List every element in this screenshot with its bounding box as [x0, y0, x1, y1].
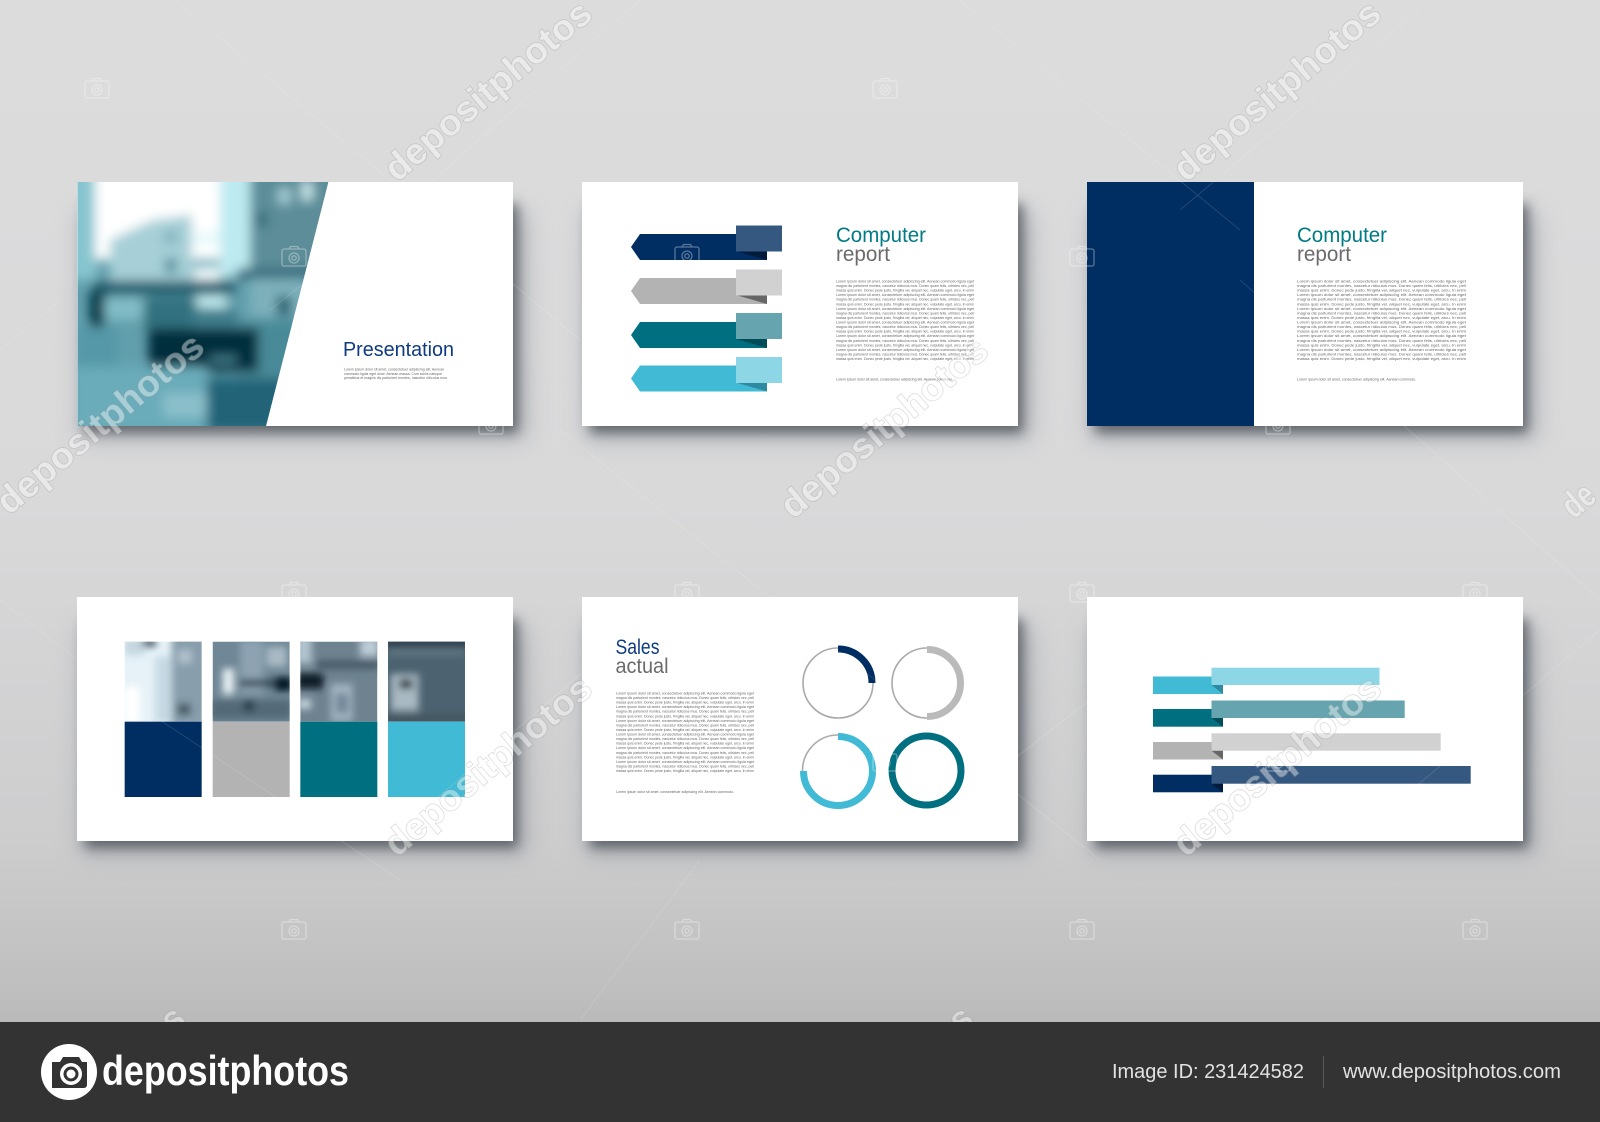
text block: sales body: massa quis enim. Donec pede justo, fringilla vel, aliquet nec, vulputate eget, arcu. In enim [616, 701, 754, 705]
text block: report body: Lorem ipsum dolor sit amet, consectetuer adipiscing elit. Aenean commodo. [1297, 378, 1416, 382]
text block: cover caption: commodo ligula eget dolor. Aenean massa. Cum sociis natoque [344, 372, 442, 376]
ring: navy quarter [803, 648, 873, 718]
text block: report body: magna dis parturient montes, nascetur ridiculus mus. Donec quam felis, ultricies nec, pell [1297, 298, 1466, 302]
panel: horizontal ribbon bars [1087, 597, 1537, 855]
text block: report body: magna dis parturient montes, nascetur ridiculus mus. Donec quam felis, ultricies nec, pell [836, 325, 974, 329]
text block: report body: massa quis enim. Donec pede justo, fringilla vel, aliquet nec, vulputate eget, arcu. In enim [836, 289, 974, 293]
swatch column 3: photo over teal [297, 637, 380, 797]
swatch column 2: photo over grey [210, 640, 293, 797]
text block: report body: massa quis enim. Donec pede justo, fringilla vel, aliquet nec, vulputate eget, arcu. In enim [1297, 289, 1466, 293]
watermark text: depositphotos repeats: os [136, 997, 193, 1054]
text block: report body: Lorem ipsum dolor sit amet, consectetuer adipiscing elit. Aenean commodo ligula eget [836, 334, 974, 338]
text block: sales body: magna dis parturient montes, nascetur ridiculus mus. Donec quam felis, ultricies nec, pell [616, 710, 754, 714]
text block: report body: Lorem ipsum dolor sit amet, consectetuer adipiscing elit. Aenean commodo. [836, 378, 953, 382]
heading: Sales actual: actual [616, 655, 668, 678]
bar: teal [1153, 700, 1405, 727]
text block: report body: massa quis enim. Donec pede justo, fringilla vel, aliquet nec, vulputate eget, arcu. In enim [836, 316, 974, 320]
website url: www.depositphotos.com [1342, 1060, 1561, 1083]
text block: sales body: magna dis parturient montes, nascetur ridiculus mus. Donec quam felis, ultricies nec, pell [616, 696, 754, 700]
ribbon: teal [631, 313, 782, 348]
ribbon: navy [631, 226, 782, 260]
panel: sales actual with rings [582, 597, 1032, 855]
text block: sales body: magna dis parturient montes, nascetur ridiculus mus. Donec quam felis, ultricies nec, pell [616, 751, 754, 755]
text block: report body: massa quis enim. Donec pede justo, fringilla vel, aliquet nec, vulputate eget, arcu. In enim [1297, 357, 1466, 361]
heading: Computer report [836, 224, 926, 266]
text block: report body: Lorem ipsum dolor sit amet, consectetuer adipiscing elit. Aenean commodo ligula eget [1297, 320, 1466, 324]
text block: sales body: magna dis parturient montes, nascetur ridiculus mus. Donec quam felis, ultricies nec, pell [616, 723, 754, 727]
text block: report body: magna dis parturient montes, nascetur ridiculus mus. Donec quam felis, ultricies nec, pell [836, 311, 974, 315]
text block: report body: Lorem ipsum dolor sit amet, consectetuer adipiscing elit. Aenean commodo ligula eget [836, 280, 974, 284]
navy sidebar [1087, 182, 1254, 426]
text block: report body: massa quis enim. Donec pede justo, fringilla vel, aliquet nec, vulputate eget, arcu. In enim [836, 343, 974, 347]
text block: report body: Lorem ipsum dolor sit amet, consectetuer adipiscing elit. Aenean commodo ligula eget [836, 293, 974, 297]
text block: cover caption: Lorem ipsum dolor sit amet, consectetuer adipiscing elit. Aenean [344, 368, 444, 372]
text block: report body: Lorem ipsum dolor sit amet, consectetuer adipiscing elit. Aenean commodo ligula eget [1297, 307, 1466, 311]
icon: depositphotos camera logo [41, 1044, 97, 1100]
heading: Computer report: Computer [836, 224, 926, 247]
heading: Sales actual [616, 636, 668, 678]
text block: report body: massa quis enim. Donec pede justo, fringilla vel, aliquet nec, vulputate eget, arcu. In enim [1297, 302, 1466, 306]
text block: report body: magna dis parturient montes, nascetur ridiculus mus. Donec quam felis, ultricies nec, pell [836, 284, 974, 288]
text block: report body: massa quis enim. Donec pede justo, fringilla vel, aliquet nec, vulputate eget, arcu. In enim [836, 302, 974, 306]
text block: sales body: Lorem ipsum dolor sit amet, consectetuer adipiscing elit. Aenean commodo ligula eget [616, 732, 754, 736]
text block: report body: magna dis parturient montes, nascetur ridiculus mus. Donec quam felis, ultricies nec, pell [836, 298, 974, 302]
text block: sales body: massa quis enim. Donec pede justo, fringilla vel, aliquet nec, vulputate eget, arcu. In enim [616, 714, 754, 718]
text block: sales body: Lorem ipsum dolor sit amet, consectetuer adipiscing elit. Aenean commodo ligula eget [616, 746, 754, 750]
ring: teal full [892, 736, 961, 805]
bar: cyan [1153, 668, 1380, 694]
heading: Computer report [1297, 224, 1387, 266]
footer bar [0, 1022, 1600, 1122]
text block: report body: magna dis parturient montes, nascetur ridiculus mus. Donec quam felis, ultricies nec, pell [1297, 339, 1466, 343]
text block: sales body: massa quis enim. Donec pede justo, fringilla vel, aliquet nec, vulputate eget, arcu. In enim [616, 728, 754, 732]
text block: report body: magna dis parturient montes, nascetur ridiculus mus. Donec quam felis, ultricies nec, pell [1297, 311, 1466, 315]
text block: sales body: magna dis parturient montes, nascetur ridiculus mus. Donec quam felis, ultricies nec, pell [616, 737, 754, 741]
text block: report body: massa quis enim. Donec pede justo, fringilla vel, aliquet nec, vulputate eget, arcu. In enim [1297, 343, 1466, 347]
text block: report body: magna dis parturient montes, nascetur ridiculus mus. Donec quam felis, ultricies nec, pell [1297, 284, 1466, 288]
heading: Sales actual: Sales [616, 636, 660, 659]
watermark text: depositphotos repeats: depositphotos [772, 329, 996, 526]
text block: sales body: massa quis enim. Donec pede justo, fringilla vel, aliquet nec, vulputate eget, arcu. In enim [616, 742, 754, 746]
text block: sales body: massa quis enim. Donec pede justo, fringilla vel, aliquet nec, vulputate eget, arcu. In enim [616, 769, 754, 773]
text block: report body: magna dis parturient montes, nascetur ridiculus mus. Donec quam felis, ultricies nec, pell [836, 339, 974, 343]
photo: blurred street scene [77, 182, 328, 426]
text block: sales body [616, 692, 754, 794]
heading: Presentation: Presentation [343, 339, 454, 361]
ring: grey half [892, 648, 962, 718]
heading: Computer report: report [1297, 243, 1351, 266]
panel: navy sidebar report [1087, 182, 1537, 440]
panel: presentation cover [67, 163, 527, 440]
text block: cover caption [344, 368, 447, 380]
text block: report body: Lorem ipsum dolor sit amet, consectetuer adipiscing elit. Aenean commodo ligula eget [836, 307, 974, 311]
watermark text: depositphotos repeats: depositphotos [376, 667, 600, 864]
text block: report body: Lorem ipsum dolor sit amet, consectetuer adipiscing elit. Aenean commodo ligula eget [1297, 334, 1466, 338]
swatch column 4: photo over cyan [388, 642, 465, 797]
text block: sales body: Lorem ipsum dolor sit amet, consectetuer adipiscing elit. Aenean commodo ligula eget [616, 719, 754, 723]
text block: report body: massa quis enim. Donec pede justo, fringilla vel, aliquet nec, vulputate eget, arcu. In enim [1297, 330, 1466, 334]
text block: sales body: Lorem ipsum dolor sit amet, consectetuer adipiscing elit. Aenean commodo ligula eget [616, 760, 754, 764]
bar: navy [1153, 766, 1471, 792]
bar: grey [1153, 733, 1441, 760]
text block: sales body: Lorem ipsum dolor sit amet, consectetuer adipiscing elit. Aenean commodo ligula eget [616, 692, 754, 696]
text block: report body [1297, 280, 1466, 382]
text block: report body: Lorem ipsum dolor sit amet, consectetuer adipiscing elit. Aenean commodo ligula eget [836, 320, 974, 324]
text block: report body: massa quis enim. Donec pede justo, fringilla vel, aliquet nec, vulputate eget, arcu. In enim [836, 330, 974, 334]
image id label: Image ID: 231424582 [1112, 1060, 1304, 1083]
panel: photo and colour swatches [77, 597, 527, 855]
ribbon: cyan [631, 357, 782, 392]
ring: cyan three quarters [802, 735, 874, 806]
watermark text: depositphotos repeats: os [924, 997, 981, 1054]
text block: cover caption: penatibus et magnis dis parturient montes, nascetur ridiculus mus [344, 376, 447, 380]
text block: report body: massa quis enim. Donec pede justo, fringilla vel, aliquet nec, vulputate eget, arcu. In enim [836, 357, 974, 361]
watermark camera icons [85, 78, 1487, 939]
text block: report body: magna dis parturient montes, nascetur ridiculus mus. Donec quam felis, ultricies nec, pell [1297, 352, 1466, 356]
text block: sales body: Lorem ipsum dolor sit amet, consectetuer adipiscing elit. Aenean commodo ligula eget [616, 705, 754, 709]
ribbon: grey [631, 270, 782, 304]
swatch column 1: photo over navy [124, 642, 202, 797]
text block: sales body: Lorem ipsum dolor sit amet, consectetuer adipiscing elit. Aenean commodo. [616, 790, 734, 794]
text block: report body: Lorem ipsum dolor sit amet, consectetuer adipiscing elit. Aenean commodo ligula eget [1297, 348, 1466, 352]
text block: report body: Lorem ipsum dolor sit amet, consectetuer adipiscing elit. Aenean commodo ligula eget [1297, 280, 1466, 284]
text block: report body: magna dis parturient montes, nascetur ridiculus mus. Donec quam felis, ultricies nec, pell [1297, 325, 1466, 329]
logo wordmark: depositphotos [102, 1047, 349, 1094]
text block: report body: Lorem ipsum dolor sit amet, consectetuer adipiscing elit. Aenean commodo ligula eget [1297, 293, 1466, 297]
heading: Computer report: report [836, 243, 890, 266]
text block: sales body: massa quis enim. Donec pede justo, fringilla vel, aliquet nec, vulputate eget, arcu. In enim [616, 755, 754, 759]
text block: report body [836, 280, 974, 382]
text block: sales body: magna dis parturient montes, nascetur ridiculus mus. Donec quam felis, ultricies nec, pell [616, 764, 754, 768]
panel: computer report with ribbons [582, 182, 1032, 440]
heading: Computer report: Computer [1297, 224, 1387, 247]
watermark text: depositphotos repeats: depositphotos [1165, 667, 1389, 864]
text block: report body: magna dis parturient montes, nascetur ridiculus mus. Donec quam felis, ultricies nec, pell [836, 352, 974, 356]
text block: report body: massa quis enim. Donec pede justo, fringilla vel, aliquet nec, vulputate eget, arcu. In enim [1297, 316, 1466, 320]
text block: report body: Lorem ipsum dolor sit amet, consectetuer adipiscing elit. Aenean commodo ligula eget [836, 348, 974, 352]
